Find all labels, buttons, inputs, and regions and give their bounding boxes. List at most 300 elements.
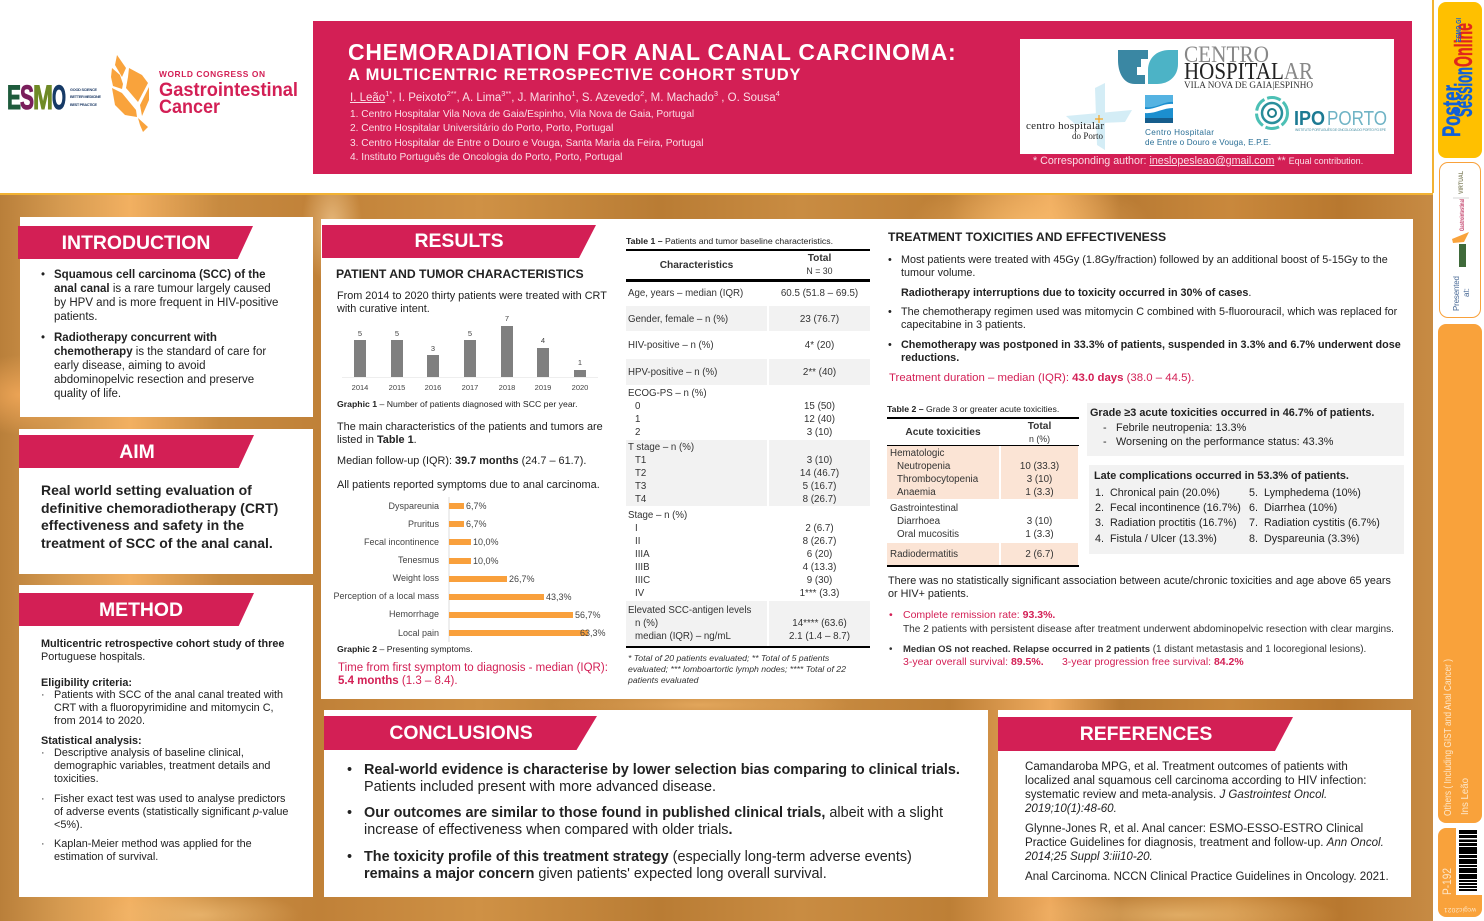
icon: Centro Hospitalar Vila Nova de Gaia logo: VILA NOVA DE GAIA|ESPINHO <box>1184 80 1314 90</box>
row values: stage: 6 (20) <box>807 549 832 560</box>
row values: stage: 9 (30) <box>807 575 832 586</box>
bar chart: presenting symptoms: 6,7% <box>466 501 487 511</box>
text: squamous cell carcinoma <box>54 269 278 323</box>
bullet text: treatment dose: tumour volume. <box>901 266 975 278</box>
bar chart: patients per year: 2018 <box>499 383 515 392</box>
row values: T stage <box>800 455 839 505</box>
table 2 header: Acute toxicities <box>905 426 981 438</box>
bullet text: chemotherapy postponed <box>888 338 1401 364</box>
text: complete remission: • <box>889 608 893 620</box>
text: treatment duration: Treatment duration – median (IQR): 43.0 days (38.0 – 44.5). <box>889 372 1194 384</box>
bullet text: treatment dose <box>888 254 1388 278</box>
sidebar tab: poster number and barcode <box>1438 828 1482 917</box>
row value: HPV: 2** (40) <box>803 367 836 378</box>
text: median follow-up: Median follow-up (IQR): 39.7 months (24.7 – 61.7). <box>337 455 586 467</box>
row value: gender: 23 (76.7) <box>800 314 839 325</box>
row value: age: 60.5 (51.8 – 69.5) <box>781 288 858 299</box>
statistical text: kaplan-meier: Kaplan-Meier method was applied for the <box>54 838 252 850</box>
text: intro to cohort: From 2014 to 2020 thirty patients were treated with CRT <box>337 290 607 302</box>
sidebar tab: category and author: Ins Leão <box>1459 778 1471 815</box>
sidebar tab: poster session online <box>1438 2 1482 158</box>
row label: stage: IV <box>635 588 644 599</box>
sidebar tab: presented at: Gastrointestinal <box>1459 199 1466 231</box>
table 2 total header: Total <box>1028 420 1051 432</box>
bar chart: presenting symptoms: Pruritus <box>408 519 439 529</box>
conclusion 2: Our outcomes are similar to those found in published clinical trials, albeit with a slight <box>364 804 943 820</box>
text: squamous cell carcinoma: anal canal is a rare tumour largely caused <box>54 283 271 295</box>
callout list: - <box>1103 436 1107 448</box>
study design <box>41 638 284 663</box>
bullet text: chemotherapy postponed: reductions. <box>901 352 959 364</box>
icon: Centro Hospitalar do Porto logo: centro hospitalar <box>1026 120 1104 132</box>
icon: ESMO wordmark: GOOD SCIENCE <box>70 88 97 92</box>
reference 1: 2019;10(1):48-60. <box>1025 803 1117 815</box>
text: radiotherapy: chemotherapy is the standard of care for <box>54 346 266 358</box>
row label: stage <box>628 510 687 599</box>
footnote: patients evaluated <box>628 675 699 685</box>
statistical text: descriptive: demographic variables, treatment details and <box>54 760 270 772</box>
eligibility text: CRT with a fluoropyrimidine and mitomycin C, <box>54 702 274 714</box>
table 1: baseline characteristics <box>626 236 870 685</box>
statistical text: fisher: <5%). <box>54 819 83 831</box>
bar chart: patients per year: 5 <box>468 329 472 338</box>
callout: grade 3 toxicities <box>1087 403 1404 456</box>
conclusion 2: • <box>347 804 352 820</box>
aim statement: effectiveness and safety in the <box>41 517 244 533</box>
row label: ECOG: 1 <box>635 414 640 425</box>
row values: ECOG: 3 (10) <box>807 427 832 438</box>
row labels: hematologic <box>890 447 978 499</box>
icon: IPO Porto logo: PORTO <box>1327 108 1387 130</box>
affiliations: 2. Centro Hospitalar Universitário do Porto, Porto, Portugal <box>350 123 613 134</box>
row label: gender: Gender, female – n (%) <box>628 314 728 325</box>
row label: stage: IIIC <box>635 575 650 586</box>
row label: T stage: T3 <box>635 481 646 492</box>
sidebar tab: presented at: VIRTUAL <box>1458 171 1465 194</box>
row labels: gastrointestinal: Oral mucositis <box>897 529 959 540</box>
row values: ECOG: 12 (40) <box>804 414 835 425</box>
heading: results <box>322 225 596 258</box>
icon: IPO Porto logo <box>1256 98 1387 132</box>
heading: aim: AIM <box>119 441 155 463</box>
row labels: hematologic: Anaemia <box>897 487 936 498</box>
list column 2: 6. Diarrhea (10%) <box>1249 502 1337 514</box>
text: intro to cohort: with curative intent. <box>337 303 430 315</box>
row values: stage <box>800 523 839 599</box>
row values: stage: 2 (6.7) <box>805 523 834 534</box>
text: no association: There was no statistically significant association between acute/chronic toxicities and age above 65 years <box>888 574 1391 586</box>
conclusion 2 <box>347 804 943 840</box>
reference 2: Glynne-Jones R, et al. Anal cancer: ESMO-ESSO-ESTRO Clinical <box>1025 823 1363 835</box>
bar chart: presenting symptoms: Dyspareunia <box>388 501 439 511</box>
panel: conclusions <box>324 710 988 897</box>
bar chart: patients per year: 4 <box>541 336 545 345</box>
eligibility text: · <box>41 689 45 701</box>
subheading: patient and tumor characteristics: PATIENT AND TUMOR CHARACTERISTICS <box>336 267 584 281</box>
row values: SCC antigen: 2.1 (1.4 – 8.7) <box>789 631 850 642</box>
sidebar tab: poster session online: Poster <box>1438 85 1466 137</box>
footnote: * Total of 20 patients evaluated; ** Total of 5 patients <box>628 653 829 663</box>
conclusion 3: The toxicity profile of this treatment strategy (especially long-term adverse events) <box>364 848 912 864</box>
affiliations: 3. Centro Hospitalar de Entre o Douro e Vouga, Santa Maria da Feira, Portugal <box>350 138 703 149</box>
title banner <box>313 21 1412 174</box>
statistical text: fisher: of adverse events (statistically significant p-value <box>54 806 288 818</box>
row label: stage: Stage – n (%) <box>628 510 687 521</box>
caption: graphic 1: Graphic 1 – Number of patients diagnosed with SCC per year. <box>337 399 577 409</box>
caption: table 1: Table 1 – Patients and tumor baseline characteristics. <box>626 236 833 246</box>
icon: IPO Porto logo: IPO <box>1294 108 1325 130</box>
bar chart: patients per year <box>342 314 598 392</box>
icon: orange leaf <box>111 55 149 132</box>
text: median OS: Median OS not reached. Relapse occurred in 2 patients (1 distant metastasis and 1 locoregional lesions). <box>903 644 1366 654</box>
text: no association <box>888 574 1391 600</box>
study design: Portuguese hospitals. <box>41 651 145 663</box>
congress name: Gastrointestinal <box>159 79 298 101</box>
study design: Multicentric retrospective cohort study of three <box>41 638 284 650</box>
text: radiotherapy interruptions: Radiotherapy interruptions due to toxicity occurred in 30% of cases. <box>901 287 1251 299</box>
row value: radiodermatitis: 2 (6.7) <box>1025 549 1054 560</box>
text: squamous cell carcinoma: patients. <box>54 311 97 323</box>
icon: ESMO wordmark: O <box>52 79 66 117</box>
reference 1: systematic review and meta-analysis. J Gastrointest Oncol. <box>1025 789 1327 801</box>
subheading: treatment toxicities and effectiveness: TREATMENT TOXICITIES AND EFFECTIVENESS <box>888 230 1166 244</box>
conclusion 1: Patients included present with more advanced disease. <box>364 779 716 795</box>
heading: introduction: INTRODUCTION <box>62 232 210 254</box>
text: persistent disease: The 2 patients with persistent disease after treatment underwent abdominopelvic resection with clear margins. <box>903 624 1394 634</box>
row label: SCC antigen: median (IQR) – ng/mL <box>635 631 731 642</box>
sidebar tab: presented at: Presented <box>1452 276 1461 311</box>
bar chart: patients per year: 2019 <box>535 383 551 392</box>
aim statement: treatment of SCC of the anal canal. <box>41 534 273 550</box>
text: intro to cohort <box>337 290 607 315</box>
bullet: squamous cell carcinoma: • <box>41 269 45 281</box>
text: squamous cell carcinoma: Squamous cell carcinoma (SCC) of the <box>54 269 266 281</box>
table 1 total column header: N = 30 <box>806 266 833 276</box>
panel: references <box>998 710 1411 897</box>
icon: Centro Hospitalar Vila Nova de Gaia logo <box>1118 42 1314 90</box>
table 2 total header <box>1028 420 1051 444</box>
row value: HIV: 4* (20) <box>805 340 834 351</box>
bar chart: presenting symptoms: Weight loss <box>393 573 439 583</box>
text: time to diagnosis <box>338 662 608 687</box>
aim statement: definitive chemoradiotherapy (CRT) <box>41 500 278 516</box>
row labels: gastrointestinal: Diarrhoea <box>897 516 940 527</box>
text: radiotherapy <box>54 332 266 400</box>
caption: table 2: Table 2 – Grade 3 or greater acute toxicities. <box>887 404 1059 414</box>
bar chart: patients per year: 5 <box>395 329 399 338</box>
hospital logos <box>1020 39 1394 154</box>
sidebar tab: presented at: at: <box>1462 288 1471 297</box>
list column 2: 7. Radiation cystitis (6.7%) <box>1249 517 1380 529</box>
row label: SCC antigen <box>628 605 751 642</box>
aim statement <box>41 482 278 550</box>
bar chart: presenting symptoms: Local pain <box>398 628 439 638</box>
bar chart: patients per year: 5 <box>358 329 362 338</box>
callout heading: Late complications occurred in 53.3% of patients. <box>1094 470 1349 482</box>
row label: ECOG: 0 <box>635 401 640 412</box>
row label: SCC antigen: Elevated SCC-antigen levels <box>628 605 751 616</box>
bar chart: patients per year: 2016 <box>425 383 441 392</box>
row values: hematologic: 3 (10) <box>1027 474 1052 485</box>
icon: Centro Hospitalar Vila Nova de Gaia logo: HOSPITALAR <box>1184 59 1313 85</box>
affiliations: 4. Instituto Português de Oncologia do Porto, Porto, Portugal <box>350 152 622 163</box>
row label: SCC antigen: n (%) <box>635 618 658 629</box>
affiliations <box>350 109 703 163</box>
row label: stage: II <box>635 536 640 547</box>
heading: references: REFERENCES <box>1080 723 1212 745</box>
bar chart: presenting symptoms: 6,7% <box>466 519 487 529</box>
row values: SCC antigen: 14**** (63.6) <box>792 618 847 629</box>
bullet text: chemotherapy regimen <box>888 306 1398 330</box>
bullet text: chemotherapy postponed: Chemotherapy was postponed in 33.3% of patients, suspended in 3.3% and 6.7% underwent dose <box>901 338 1401 350</box>
callout list: - <box>1103 422 1107 434</box>
row values: gastrointestinal: 3 (10) <box>1027 516 1052 527</box>
heading: references <box>998 717 1293 751</box>
footnote <box>628 653 846 685</box>
icon: Centro Hospitalar do Porto logo <box>1026 83 1132 150</box>
row values: T stage: 8 (26.7) <box>803 494 836 505</box>
icon: ESMO wordmark: BEST PRACTICE <box>70 103 97 107</box>
row label: T stage: T1 <box>635 455 646 466</box>
text: progression free survival: 3-year progression free survival: 84.2% <box>1062 656 1244 668</box>
table 2 total header: n (%) <box>1029 434 1050 444</box>
list column 1: 1. Chronical pain (20.0%) <box>1095 486 1220 498</box>
bar chart: presenting symptoms: 63,3% <box>580 628 606 638</box>
list column 1 <box>1095 486 1241 547</box>
bar chart: presenting symptoms: Hemorrhage <box>389 609 439 619</box>
corresponding author: * Corresponding author: ineslopesleao@gmail.com ** Equal contribution. <box>1033 155 1363 167</box>
bar chart: presenting symptoms: 10,0% <box>473 556 499 566</box>
table 1 total column header <box>806 252 833 276</box>
aim statement: Real world setting evaluation of <box>41 482 252 498</box>
text: radiotherapy: abdominopelvic resection and preserve <box>54 374 254 386</box>
callout list <box>1103 420 1333 448</box>
text: radiotherapy: quality of life. <box>54 388 121 400</box>
text: main characteristics: listed in Table 1. <box>337 434 417 446</box>
conclusion 3: • <box>347 848 352 864</box>
row label: stage: I <box>635 523 638 534</box>
panel: aim <box>19 429 313 574</box>
conference logo: ESMO World Congress on Gastrointestinal Cancer <box>7 55 298 132</box>
authors: I. Leão1*, I. Peixoto2**, A. Lima3**, J. Marinho1, S. Azevedo2, M. Machado3 , O. Sousa4 <box>350 89 780 104</box>
bullet text: chemotherapy regimen: capecitabine in 3 patients. <box>901 318 1026 330</box>
text: main characteristics: The main characteristics of the patients and tumors are <box>337 421 603 433</box>
eligibility heading: Eligibility criteria: <box>41 677 132 689</box>
row values: stage: 8 (26.7) <box>803 536 836 547</box>
row values: hematologic: 1 (3.3) <box>1025 487 1054 498</box>
callout list: Worsening on the performance status: 43.3% <box>1116 436 1333 448</box>
reference 2 <box>1025 822 1384 864</box>
callout list: Febrile neutropenia: 13.3% <box>1116 422 1246 434</box>
row label: T stage: T2 <box>635 468 646 479</box>
row values: ECOG: 15 (50) <box>804 401 835 412</box>
conclusion 1: Real-world evidence is characterise by lower selection bias comparing to clinical trials. <box>364 762 960 778</box>
bar chart: presenting symptoms: Tenesmus <box>398 555 439 565</box>
conclusion 1 <box>347 762 960 796</box>
row values: ECOG <box>804 401 835 438</box>
statistical text: descriptive: Descriptive analysis of baseline clinical, <box>54 747 244 759</box>
icon: Centro Hospitalar de Entre o Douro e Vouga logo <box>1145 95 1271 147</box>
list column 1: 4. Fistula / Ulcer (13.3%) <box>1095 533 1217 545</box>
bar chart: presenting symptoms: 10,0% <box>473 537 499 547</box>
bar chart: patients per year: 7 <box>505 314 509 323</box>
icon: Centro Hospitalar de Entre o Douro e Vouga logo: Centro Hospitalar <box>1145 128 1214 137</box>
row values: hematologic <box>1001 460 1078 499</box>
row label: T stage: T stage – n (%) <box>628 442 694 453</box>
row labels: hematologic: Neutropenia <box>897 461 950 472</box>
row labels: Age, years – median (IQR) <box>628 288 743 299</box>
subtitle: A MULTICENTRIC RETROSPECTIVE COHORT STUDY <box>348 66 801 84</box>
eligibility text: from 2014 to 2020. <box>54 715 145 727</box>
conclusion 3: remains a major concern given patients' expected long overall survival. <box>364 866 827 882</box>
bar chart: presenting symptoms <box>333 497 606 642</box>
row values: T stage: 14 (46.7) <box>800 468 839 479</box>
row label: stage: IIIA <box>635 549 650 560</box>
bar chart: presenting symptoms: 56,7% <box>575 610 601 620</box>
list column 2: 8. Dyspareunia (3.3%) <box>1249 533 1359 545</box>
bar chart: presenting symptoms: 43,3% <box>546 592 572 602</box>
callout heading: Grade ≥3 acute toxicities occurred in 46.7% of patients. <box>1090 407 1374 419</box>
heading: conclusions <box>324 716 597 750</box>
row values: SCC antigen <box>789 618 850 642</box>
row values: stage: 1*** (3.3) <box>800 588 839 599</box>
row label: T stage: T4 <box>635 494 646 505</box>
icon: ESMO wordmark: S <box>20 79 34 117</box>
bullet text: treatment dose: Most patients were treated with 45Gy (1.8Gy/fraction) followed by an additional boost of 5-15Gy to the <box>901 254 1388 266</box>
list column 2 <box>1249 486 1380 547</box>
sidebar tab: poster session online: ESMO GI <box>1456 18 1463 42</box>
bar chart: patients per year: 2020 <box>572 383 588 392</box>
right border line of header <box>1432 0 1434 193</box>
row label: stage: IIIB <box>635 562 650 573</box>
text: radiotherapy: early disease, aiming to avoid <box>54 360 206 372</box>
list column 2: 5. Lymphedema (10%) <box>1249 486 1361 498</box>
bar chart: patients per year: 2017 <box>462 383 478 392</box>
text: radiotherapy: Radiotherapy concurrent with <box>54 332 217 344</box>
table 2: acute toxicities <box>887 404 1079 567</box>
congress name: WORLD CONGRESS ON <box>159 69 265 79</box>
text: squamous cell carcinoma: by HPV and is more frequent in HIV-positive <box>54 297 278 309</box>
heading: method <box>19 593 254 626</box>
sidebar tab: category and author: Others ( Including GIST and Anal Cancer ) <box>1442 659 1454 816</box>
row labels: gastrointestinal: Gastrointestinal <box>890 503 958 514</box>
sidebar tab: poster number and barcode: P-192 <box>1442 868 1454 895</box>
heading: results: RESULTS <box>414 230 504 252</box>
title: CHEMORADIATION FOR ANAL CANAL CARCINOMA: <box>348 39 956 65</box>
row label: ECOG: ECOG-PS – n (%) <box>628 388 707 399</box>
sidebar tab: presented at <box>1439 162 1481 318</box>
heading: conclusions: CONCLUSIONS <box>389 722 533 744</box>
row labels: hematologic: Hematologic <box>890 448 944 459</box>
reference 2: 2014;25 Suppl 3:iii10-20. <box>1025 851 1153 863</box>
eligibility text <box>41 689 283 727</box>
heading: method: METHOD <box>99 599 183 621</box>
text: time to diagnosis: 5.4 months (1.3 – 8.4). <box>338 675 458 687</box>
bullet text: chemotherapy postponed: • <box>888 338 892 350</box>
heading: introduction <box>18 226 253 259</box>
panel: results <box>321 219 1413 699</box>
conclusion 3 <box>347 848 912 884</box>
statistical heading: Statistical analysis: <box>41 735 142 747</box>
icon: ESMO wordmark: E <box>7 79 21 117</box>
congress name: Cancer <box>159 96 220 118</box>
bullet text: chemotherapy regimen: • <box>888 306 892 318</box>
footnote: evaluated; *** lomboartortic lymph nodes; **** Total of 22 <box>628 664 846 674</box>
panel: introduction <box>20 217 313 417</box>
icon: Centro Hospitalar de Entre o Douro e Vouga logo: de Entre o Douro e Vouga, E.P.E. <box>1145 138 1271 147</box>
row values: T stage: 5 (16.7) <box>803 481 836 492</box>
bar chart: patients per year: 2015 <box>389 383 405 392</box>
panel: method <box>19 585 313 897</box>
row values: T stage: 3 (10) <box>807 455 832 466</box>
reference 1 <box>1025 760 1366 816</box>
bar chart: patients per year: 1 <box>578 358 582 367</box>
caption: graphic 2: Graphic 2 – Presenting symptoms. <box>337 644 473 654</box>
reference 3: Anal Carcinoma. NCCN Clinical Practice Guidelines in Oncology. 2021. <box>1025 871 1389 883</box>
bar chart: patients per year: 2014 <box>352 383 368 392</box>
row label: ECOG: 2 <box>635 427 640 438</box>
conclusion 2: increase of effectiveness when compared with older trials. <box>364 822 732 838</box>
bar chart: presenting symptoms: 26,7% <box>509 574 535 584</box>
bar chart: presenting symptoms: Fecal incontinence <box>364 537 439 547</box>
text: no association: or HIV+ patients. <box>888 588 969 600</box>
heading: aim <box>19 435 254 468</box>
row label: ECOG <box>628 388 707 438</box>
bullet text: chemotherapy regimen: The chemotherapy regimen used was mitomycin C combined with 5-fluorouracil, which was replaced for <box>901 306 1397 318</box>
sidebar tab: category and author <box>1438 324 1482 823</box>
affiliations: 1. Centro Hospitalar Vila Nova de Gaia/Espinho, Vila Nova de Gaia, Portugal <box>350 109 694 120</box>
list column 1: 3. Radiation proctitis (16.7%) <box>1095 517 1237 529</box>
callout: late complications <box>1089 465 1404 554</box>
row labels: gastrointestinal <box>890 502 959 541</box>
reference 2: Practice Guidelines for diagnosis, treatment and follow-up. Ann Oncol. <box>1025 837 1384 849</box>
bullet: radiotherapy: • <box>41 332 45 344</box>
sidebar tab: poster number and barcode: wcgic2021 <box>1444 906 1477 913</box>
text: symptoms: All patients reported symptoms due to anal carcinoma. <box>337 479 600 491</box>
row labels: hematologic: Thrombocytopenia <box>897 474 978 485</box>
text: time to diagnosis: Time from first symptom to diagnosis - median (IQR): <box>338 662 608 674</box>
statistical text: descriptive: toxicities. <box>54 773 99 785</box>
table 1 header: Characteristics <box>660 260 733 270</box>
statistical text: descriptive: · <box>41 747 45 759</box>
statistical text: fisher <box>41 793 288 831</box>
conclusion 1: • <box>347 762 352 778</box>
row values: stage: 4 (13.3) <box>803 562 836 573</box>
bar chart: patients per year: 3 <box>431 344 435 353</box>
statistical text: fisher: · <box>41 793 45 805</box>
row label: T stage <box>628 442 694 505</box>
row values: hematologic: 10 (33.3) <box>1020 461 1059 472</box>
text: complete remission: Complete remission rate: 93.3%. <box>903 608 1055 620</box>
bullet text: treatment dose: • <box>888 254 892 266</box>
row values: gastrointestinal <box>1001 515 1078 541</box>
row label: HIV: HIV-positive – n (%) <box>628 340 714 351</box>
congress name <box>159 69 298 118</box>
gold background <box>0 193 1433 921</box>
list column 1: 2. Fecal incontinence (16.7%) <box>1095 502 1241 514</box>
icon: ESMO wordmark: M <box>33 79 53 117</box>
row label: HPV: HPV-positive – n (%) <box>628 367 717 378</box>
statistical text: descriptive <box>41 747 270 785</box>
table 1 total column header: Total <box>808 252 831 264</box>
statistical text: kaplan-meier <box>41 838 252 863</box>
reference 1: Camandaroba MPG, et al. Treatment outcomes of patients with <box>1025 761 1348 773</box>
statistical text: kaplan-meier: · <box>41 838 45 850</box>
text: survival: 3-year overall survival: 89.5%. <box>903 656 1044 668</box>
sidebar tab: poster session online: Session <box>1450 67 1478 117</box>
eligibility text: Patients with SCC of the anal canal treated with <box>54 689 283 701</box>
statistical text: kaplan-meier: estimation of survival. <box>54 851 158 863</box>
